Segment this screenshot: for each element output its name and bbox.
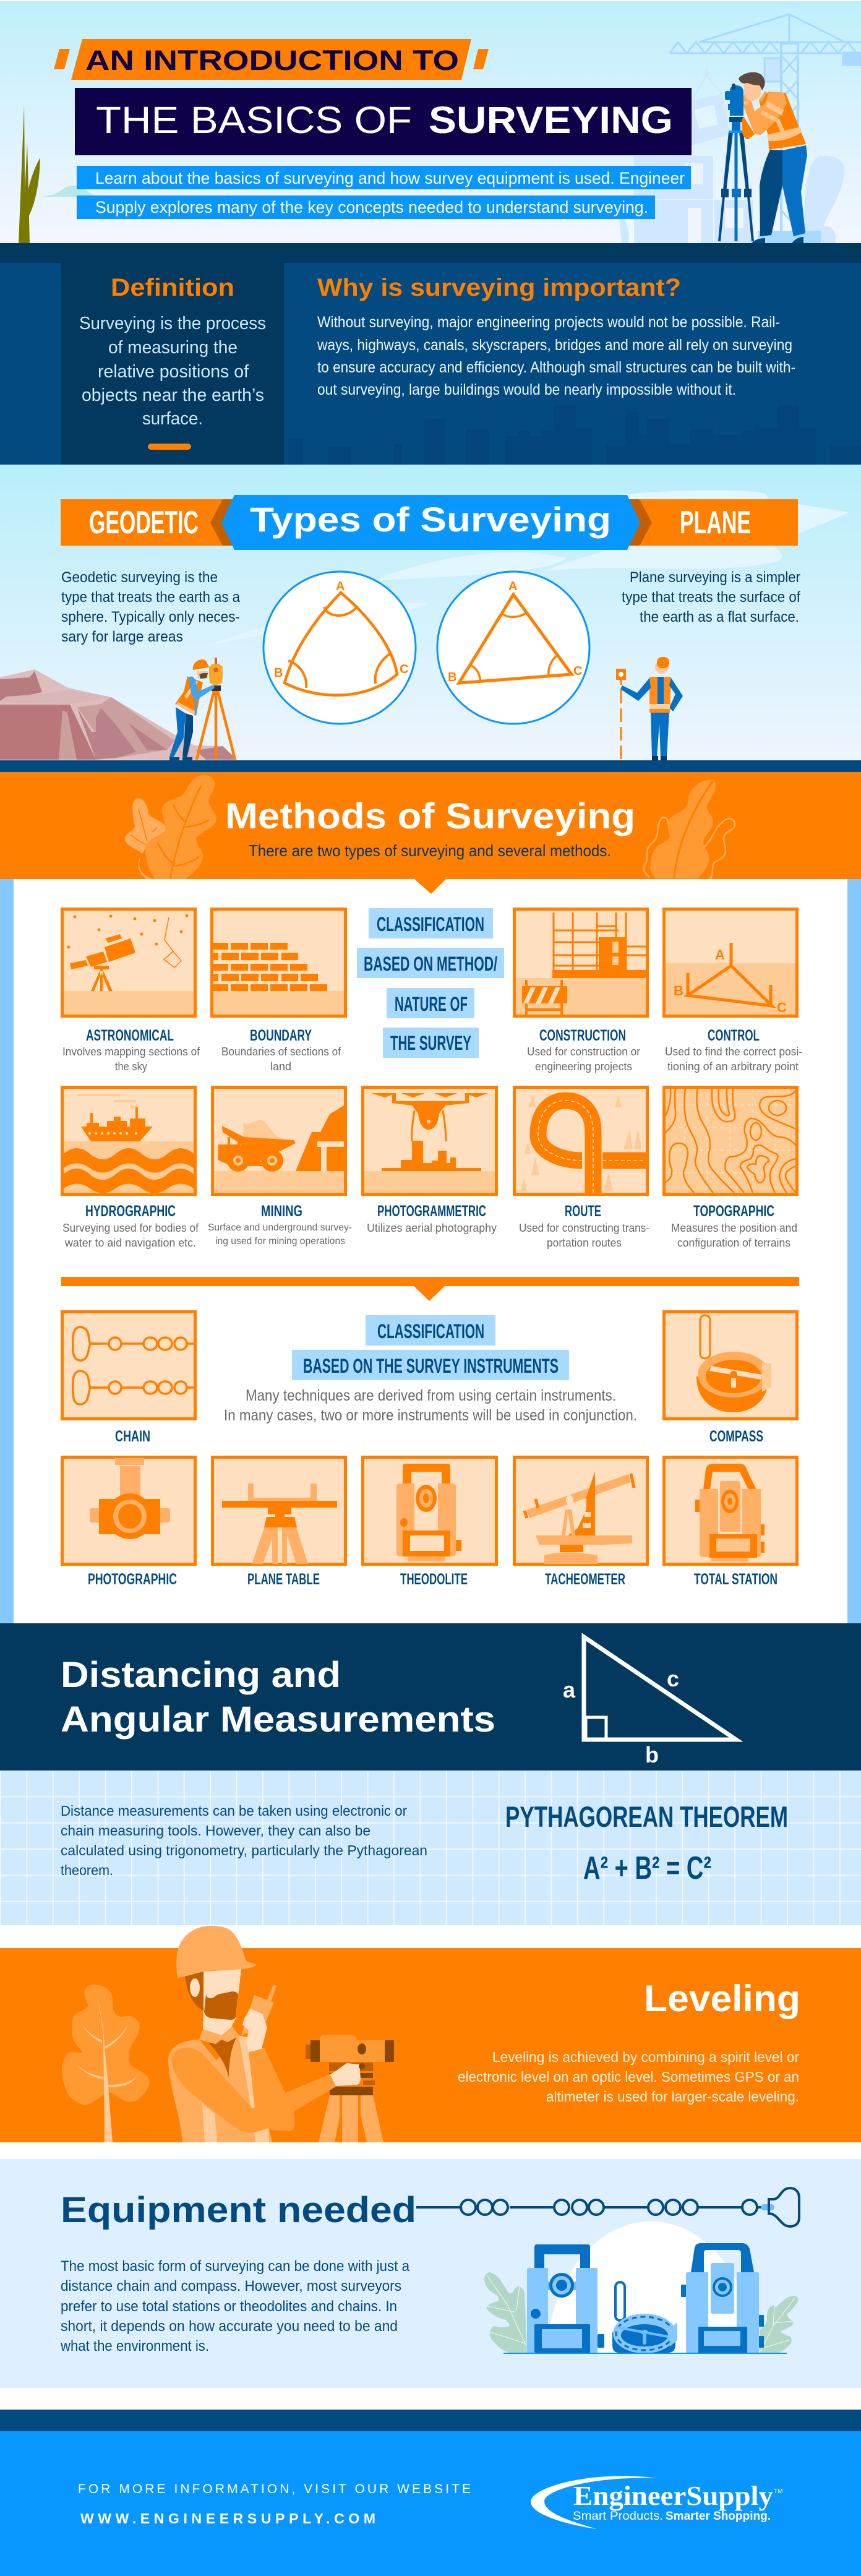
label: hydrographic: Surveying used for bodies of: [62, 1222, 199, 1234]
text block: equipment: The most basic form of surveying can be done with just a: [61, 2258, 410, 2275]
text block: distance measurements: theorem.: [61, 1862, 113, 1878]
label: control: CONTROL: [708, 1027, 760, 1044]
card: theodolite: [362, 1458, 496, 1564]
text block: plane: the earth as a flat surface.: [640, 609, 799, 625]
text block: leveling: [458, 2049, 799, 2105]
text block: geodetic: Geodetic surveying is the: [61, 569, 218, 586]
illustration: plane surveyor with staff: [616, 657, 683, 760]
divider bar with pointer: [61, 1277, 799, 1301]
icon: grass: [19, 105, 40, 243]
text block: plane: type that treats the surface of: [622, 589, 800, 606]
panel: definition: objects near the earth’s: [82, 385, 264, 405]
label: photogrammetric: [367, 1203, 497, 1234]
icon: right leaves: [644, 779, 735, 878]
card: boundary: [212, 909, 345, 1016]
tags: classification based on method: THE SURVEY: [390, 1032, 471, 1054]
tags: classification based on instruments: [292, 1315, 569, 1380]
panel: pythagorean theorem grid: [0, 1771, 861, 1925]
label: chain: CHAIN: [115, 1428, 150, 1445]
card: astronomical: [62, 909, 195, 1016]
call to action: [78, 2482, 471, 2527]
label: control: tioning of an arbitrary point: [667, 1060, 799, 1073]
label: construction: CONSTRUCTION: [539, 1027, 626, 1044]
card: tacheometer: [515, 1458, 647, 1564]
banner: geodetic, types of surveying, plane: PLANE: [680, 505, 751, 541]
formula: pythagorean theorem: A² + B² = C²: [583, 1850, 711, 1886]
text block: distance measurements: [61, 1803, 427, 1878]
label: astronomical: ASTRONOMICAL: [86, 1027, 174, 1044]
tags: classification based on method: BASED ON METHOD/: [364, 953, 497, 975]
panel: definition: Surveying is the process: [79, 314, 266, 333]
text block: why is surveying important: to ensure accuracy and efficiency. Although small structures can be built with-: [317, 359, 795, 376]
label: topographic: configuration of terrains: [677, 1237, 790, 1249]
panel: methods of surveying header: [0, 772, 861, 879]
panel: classification: [0, 879, 861, 1623]
title: the basics of surveying: THE BASICS OF: [96, 99, 412, 141]
label: control: Used to find the correct posi-: [665, 1045, 802, 1058]
text block: equipment: prefer to use total stations or theodolites and chains. In: [61, 2298, 397, 2315]
card: control: A: [715, 947, 725, 963]
logo: engineer supply: EngineerSupply: [573, 2481, 773, 2511]
label: construction: engineering projects: [535, 1060, 632, 1073]
illustration: survey equipment: [484, 2243, 799, 2354]
panel: definition: Definition: [111, 274, 234, 301]
heading: [61, 1655, 495, 1740]
formula: pythagorean theorem: [505, 1800, 788, 1886]
label: astronomical: the sky: [115, 1060, 147, 1073]
label: astronomical: Involves mapping sections of: [62, 1045, 200, 1058]
tags: classification based on method: CLASSIFICATION: [377, 913, 484, 935]
label: astronomical: [62, 1027, 200, 1073]
diagram: spherical triangle: C: [400, 663, 408, 676]
icon: left leaves: [125, 775, 216, 879]
text block: leveling: electronic level on an optic level. Sometimes GPS or an: [458, 2069, 799, 2085]
card: construction: [515, 909, 647, 1016]
title banner: an introduction to: AN INTRODUCTION TO: [85, 45, 459, 76]
call to action: WWW.ENGINEERSUPPLY.COM: [80, 2510, 375, 2527]
label: compass: COMPASS: [709, 1428, 763, 1445]
diagram: spherical triangle: [263, 572, 416, 724]
background buildings: [619, 62, 844, 243]
text block: geodetic: sary for large areas: [61, 629, 183, 645]
diagram: right triangle: [563, 1637, 736, 1767]
illustration: worker with level: [168, 1926, 394, 2142]
skyline silhouette: [288, 405, 861, 465]
text block: geodetic: sphere. Typically only neces-: [61, 609, 240, 625]
banner: geodetic, types of surveying, plane: GEODETIC: [89, 505, 199, 541]
logo: engineer supply: Smart Products.: [573, 2510, 663, 2523]
label: route: [519, 1203, 649, 1249]
intro text bars: [77, 166, 691, 219]
title banner: an introduction to: [54, 39, 489, 80]
subheading: There are two types of surveying and several methods.: [249, 841, 611, 860]
panel: types of surveying: [0, 465, 861, 760]
icon: tree: [62, 1985, 150, 2142]
text block: geodetic: [61, 569, 241, 645]
icon: mountain: [0, 669, 237, 760]
text block: instruments description: Many techniques are derived from using certain instruments.: [246, 1387, 616, 1404]
divider band: [0, 760, 861, 772]
text block: why is surveying important: Why is surveying important?: [317, 274, 681, 301]
card: photogrammetric: [362, 1088, 496, 1194]
diagram: plane triangle: C: [573, 664, 582, 678]
label: boundary: BOUNDARY: [250, 1027, 312, 1044]
panel: definition: of measuring the: [108, 338, 238, 358]
tags: classification based on instruments: BASED ON THE SURVEY INSTRUMENTS: [303, 1355, 559, 1377]
card: control: B: [674, 983, 683, 998]
heading: Distancing and: [61, 1655, 341, 1695]
panel: definition: [61, 243, 284, 465]
text block: leveling: Leveling is achieved by combining a spirit level or: [492, 2049, 799, 2065]
label: mining: Surface and underground survey-: [208, 1222, 352, 1233]
intro text bars: Supply explores many of the key concepts needed to understand surveying.: [95, 198, 648, 217]
text block: leveling: altimeter is used for larger-scale leveling.: [546, 2089, 799, 2105]
panel: definition and importance: [0, 243, 861, 465]
card: topographic: [664, 1088, 797, 1194]
label: tacheometer: TACHEOMETER: [545, 1571, 625, 1588]
label: route: ROUTE: [565, 1203, 601, 1220]
diagram: plane triangle: A: [508, 580, 517, 593]
illustration: geodetic surveyor: [169, 658, 235, 760]
heading: Angular Measurements: [61, 1699, 495, 1740]
text block: plane: Plane surveying is a simpler: [630, 569, 800, 586]
pale cloud left: [40, 186, 99, 197]
diagram: plane triangle: [437, 572, 589, 724]
card: control: C: [777, 1000, 787, 1015]
tags: classification based on instruments: CLASSIFICATION: [377, 1320, 484, 1342]
label: route: portation routes: [547, 1237, 622, 1249]
label: mining: [208, 1203, 352, 1247]
label: boundary: Boundaries of sections of: [221, 1045, 341, 1058]
card: plane table: [213, 1458, 345, 1564]
card: mining: [213, 1088, 345, 1194]
panel: leveling: [0, 1926, 861, 2142]
card: compass: [664, 1312, 797, 1419]
card: route: [515, 1088, 647, 1194]
label: total station: TOTAL STATION: [694, 1571, 777, 1588]
label: topographic: Measures the position and: [671, 1222, 797, 1234]
heading: Leveling: [644, 1978, 800, 2019]
icon: tower crane: [670, 14, 861, 243]
card: control: [664, 909, 797, 1016]
label: hydrographic: HYDROGRAPHIC: [85, 1203, 176, 1220]
label: boundary: [221, 1027, 341, 1073]
intro text bars: Learn about the basics of surveying and how survey equipment is used. Engineer: [95, 169, 685, 187]
label: hydrographic: [62, 1203, 199, 1249]
label: theodolite: THEODOLITE: [400, 1571, 468, 1588]
diagram: spherical triangle: B: [274, 666, 283, 680]
background clouds: [501, 98, 685, 121]
label: photogrammetric: Utilizes aerial photography: [367, 1222, 497, 1234]
illustration: surveyor with tripod: [719, 72, 807, 243]
text block: distance measurements: Distance measurements can be taken using electronic or: [61, 1803, 407, 1819]
banner: geodetic, types of surveying, plane: [61, 495, 798, 550]
panel: definition: relative positions of: [98, 362, 249, 382]
label: control: [665, 1027, 802, 1073]
text block: distance measurements: calculated using trigonometry, particularly the Pythagorean: [61, 1842, 427, 1858]
text block: equipment: short, it depends on how accurate you need to be and: [61, 2318, 398, 2335]
tags: classification based on method: NATURE OF: [395, 993, 468, 1015]
banner: geodetic, types of surveying, plane: Types of Surveying: [250, 500, 611, 539]
logo: engineer supply: TM: [774, 2488, 782, 2495]
text block: instruments description: In many cases, two or more instruments will be used in conjunction.: [224, 1407, 637, 1424]
divider band: [0, 2410, 861, 2431]
text block: distance measurements: chain measuring tools. However, they can also be: [61, 1823, 371, 1839]
title: the basics of surveying: [75, 88, 692, 155]
text block: equipment: [60, 2258, 410, 2355]
text block: equipment: distance chain and compass. However, most surveyors: [61, 2278, 401, 2295]
label: route: Used for constructing trans-: [519, 1222, 649, 1234]
label: mining: ing used for mining operations: [215, 1236, 345, 1247]
text block: why is surveying important: [317, 274, 795, 398]
text block: plane: [622, 569, 800, 625]
text block: equipment: what the environment is.: [60, 2338, 209, 2355]
label: photogrammetric: PHOTOGRAMMETRIC: [377, 1203, 486, 1220]
text block: why is surveying important: out surveying, large buildings would be nearly impossible without it.: [317, 381, 736, 398]
diagram: plane triangle: B: [448, 671, 456, 684]
text block: why is surveying important: ways, highways, canals, skyscrapers, bridges and more all rely on surveying: [317, 337, 792, 354]
card: total station: [664, 1458, 797, 1564]
text block: why is surveying important: Without surveying, major engineering projects would not be possible. Rail-: [317, 314, 780, 331]
call to action: FOR MORE INFORMATION, VISIT OUR WEBSITE: [78, 2482, 471, 2496]
card: hydrographic: [62, 1088, 195, 1194]
logo: engineer supply: [531, 2476, 782, 2529]
label: boundary: land: [270, 1060, 291, 1073]
panel: definition: surface.: [142, 409, 203, 429]
card: chain: [62, 1312, 195, 1419]
diagram: right triangle: b: [645, 1742, 659, 1767]
text block: geodetic: type that treats the earth as a: [61, 589, 241, 606]
label: plane table: PLANE TABLE: [247, 1571, 320, 1588]
label: mining: MINING: [261, 1203, 302, 1220]
logo: engineer supply: Smarter Shopping.: [666, 2510, 771, 2523]
tags: classification based on method: [357, 908, 504, 1058]
heading: Methods of Surveying: [225, 796, 635, 836]
label: construction: Used for construction or: [527, 1045, 640, 1058]
label: topographic: TOPOGRAPHIC: [693, 1203, 774, 1220]
panel: equipment needed: [0, 2159, 861, 2388]
label: construction: [527, 1027, 640, 1073]
text block: instruments description: [224, 1387, 637, 1424]
label: hydrographic: water to aid navigation etc.: [64, 1237, 196, 1249]
diagram: right triangle: a: [563, 1677, 576, 1702]
panel: distancing and angular measurements: [0, 1623, 861, 1771]
panel: footer: [0, 2431, 861, 2576]
panel: hero header: [0, 1, 861, 243]
diagram: right triangle: c: [667, 1666, 679, 1691]
clouds: [210, 490, 849, 645]
heading: Equipment needed: [61, 2190, 416, 2230]
icon: measuring chain: [416, 2188, 799, 2226]
diagram: spherical triangle: A: [336, 580, 345, 593]
white dome: [550, 2222, 745, 2353]
label: photographic: PHOTOGRAPHIC: [88, 1571, 177, 1588]
label: topographic: [671, 1203, 797, 1249]
card: photographic: [62, 1458, 195, 1564]
title: the basics of surveying: SURVEYING: [429, 99, 673, 141]
